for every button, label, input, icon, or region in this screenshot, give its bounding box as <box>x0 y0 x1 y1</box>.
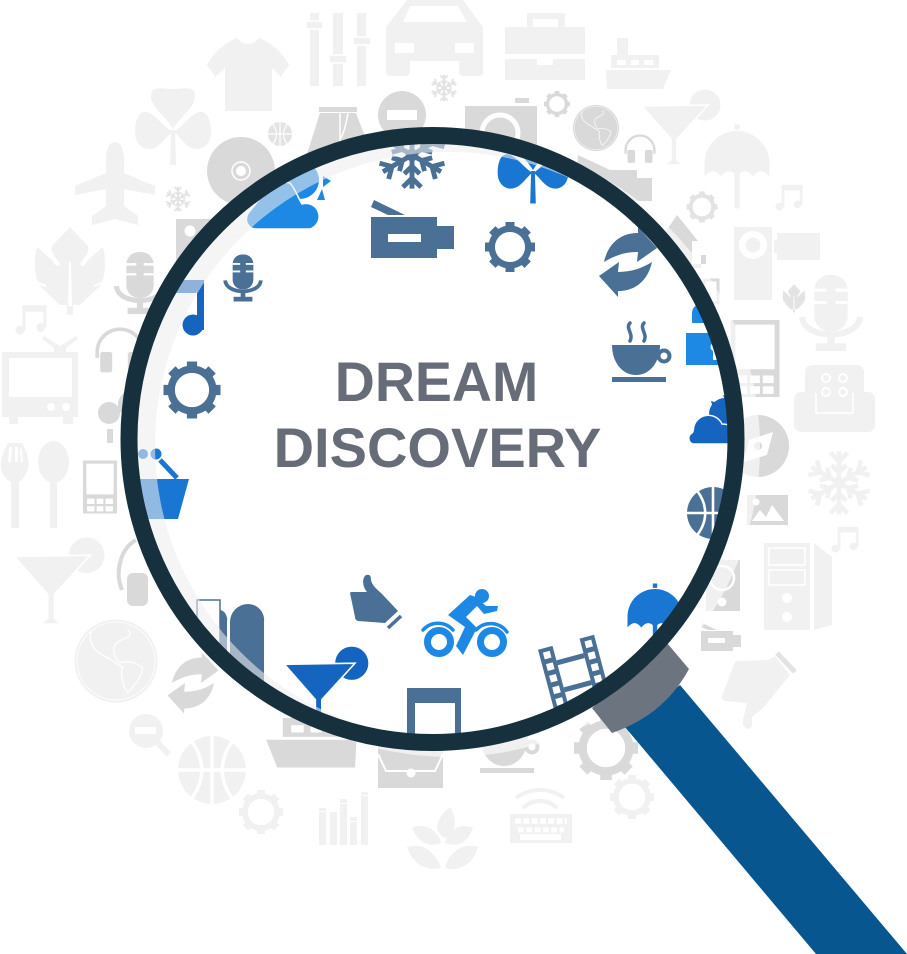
icon: coffee cup bottom <box>480 714 540 773</box>
icon: fan <box>498 154 568 204</box>
icon: mobile phone left <box>83 460 117 514</box>
icon: music note left <box>15 305 46 335</box>
icon: compact disc <box>207 137 275 205</box>
icon: small gear bottom <box>601 766 663 828</box>
icon: ship top <box>606 38 671 89</box>
icon: thumbs up <box>350 575 401 628</box>
icon: no-entry sign <box>378 91 426 139</box>
icon: mobile phone right <box>730 320 780 397</box>
lens interior <box>136 143 728 735</box>
icon: lamp <box>302 107 378 170</box>
icon: microphone right <box>802 275 860 351</box>
icon: bar chart <box>319 792 368 845</box>
icon: video camera top right <box>575 155 652 201</box>
icon: cocktail <box>286 646 368 712</box>
icon: picture frame <box>747 495 788 525</box>
icon: books <box>197 600 264 685</box>
icon: cocktail top <box>642 90 720 165</box>
icon: compass <box>727 415 789 477</box>
icon: small snowflake left <box>166 187 190 211</box>
icon: padlock <box>686 306 718 365</box>
icon: umbrella <box>628 584 678 636</box>
icon: picture frame bottom <box>407 688 461 734</box>
icon: t-shirt <box>207 38 289 111</box>
icon: motorcycle <box>423 589 507 655</box>
icon: thumb down <box>722 653 795 729</box>
icon: small gear top <box>539 86 575 122</box>
icon: gear top <box>485 222 535 272</box>
icon: basketball <box>687 487 724 539</box>
icon: large gear bottom <box>561 703 651 793</box>
icon: fan <box>135 88 211 165</box>
subtitle word: DISCOVERY <box>274 416 601 479</box>
icon: briefcase bottom <box>378 745 443 788</box>
icon: sliders <box>306 13 371 86</box>
magnifier collar <box>592 643 689 733</box>
icon: ship bottom <box>266 693 356 768</box>
icon: gear bottom left <box>230 781 292 843</box>
icon: cloud with sun <box>247 168 331 228</box>
icon: magnifier small <box>129 714 171 757</box>
icon: video camera <box>371 200 454 258</box>
magnifier handle <box>625 685 907 954</box>
icon: keyboard wifi <box>510 790 572 843</box>
lens rim highlight <box>136 143 741 738</box>
icon: music note lower right <box>831 527 859 553</box>
icon: leaves bottom <box>407 807 478 869</box>
icon: small video camera lower right <box>701 623 741 651</box>
icon: music note top right <box>775 185 803 211</box>
icon: television <box>2 336 78 424</box>
icon: headphones left <box>97 329 143 372</box>
title: DREAM <box>335 351 538 413</box>
icon: film lamp left <box>98 390 130 443</box>
icon: snowflake <box>379 144 445 189</box>
icon: speaker right <box>706 560 740 611</box>
icon: desktop tower <box>764 543 832 630</box>
magnifier ring <box>129 136 736 742</box>
icon: speaker left <box>176 219 236 279</box>
icon: coffee cup <box>612 323 672 382</box>
icon: refresh arrows <box>167 652 219 714</box>
icon: house <box>660 215 718 303</box>
panel: icons seen through the lens <box>130 121 741 740</box>
icon: cloud with sun right <box>690 395 728 444</box>
icon: car <box>386 0 483 76</box>
icon: briefcase <box>505 13 585 80</box>
icon: headphones lower left <box>119 540 148 606</box>
icon: compact camera right <box>734 227 820 300</box>
icon: microphone left <box>116 252 164 314</box>
icon: snowflake right <box>807 451 871 515</box>
icon: small snowflake top <box>431 75 457 101</box>
icon: globe lower left <box>74 620 158 702</box>
icon: refresh arrows <box>599 227 657 297</box>
icon: small basketball <box>268 122 292 146</box>
icon: globe top <box>573 105 619 151</box>
icon: small leaf right <box>783 284 805 312</box>
icon: umbrella top <box>704 124 770 208</box>
icon: headphones top <box>626 136 654 163</box>
icon: microphone <box>225 254 261 302</box>
icon: leaf left <box>35 227 105 315</box>
icon: plane <box>75 142 155 225</box>
icon: armchair <box>794 365 875 432</box>
icon: gear left <box>164 362 220 418</box>
icon: basketball bottom <box>178 736 246 804</box>
icon: music note <box>176 280 204 336</box>
icon: fork and spoon <box>1 441 69 528</box>
icon: camera <box>465 98 537 166</box>
icon: gear top right <box>680 185 724 229</box>
icon: cocktail left <box>14 537 105 624</box>
outer glass glow <box>132 137 760 757</box>
icon: shopping basket <box>138 448 189 519</box>
icon: film strip <box>538 634 606 708</box>
